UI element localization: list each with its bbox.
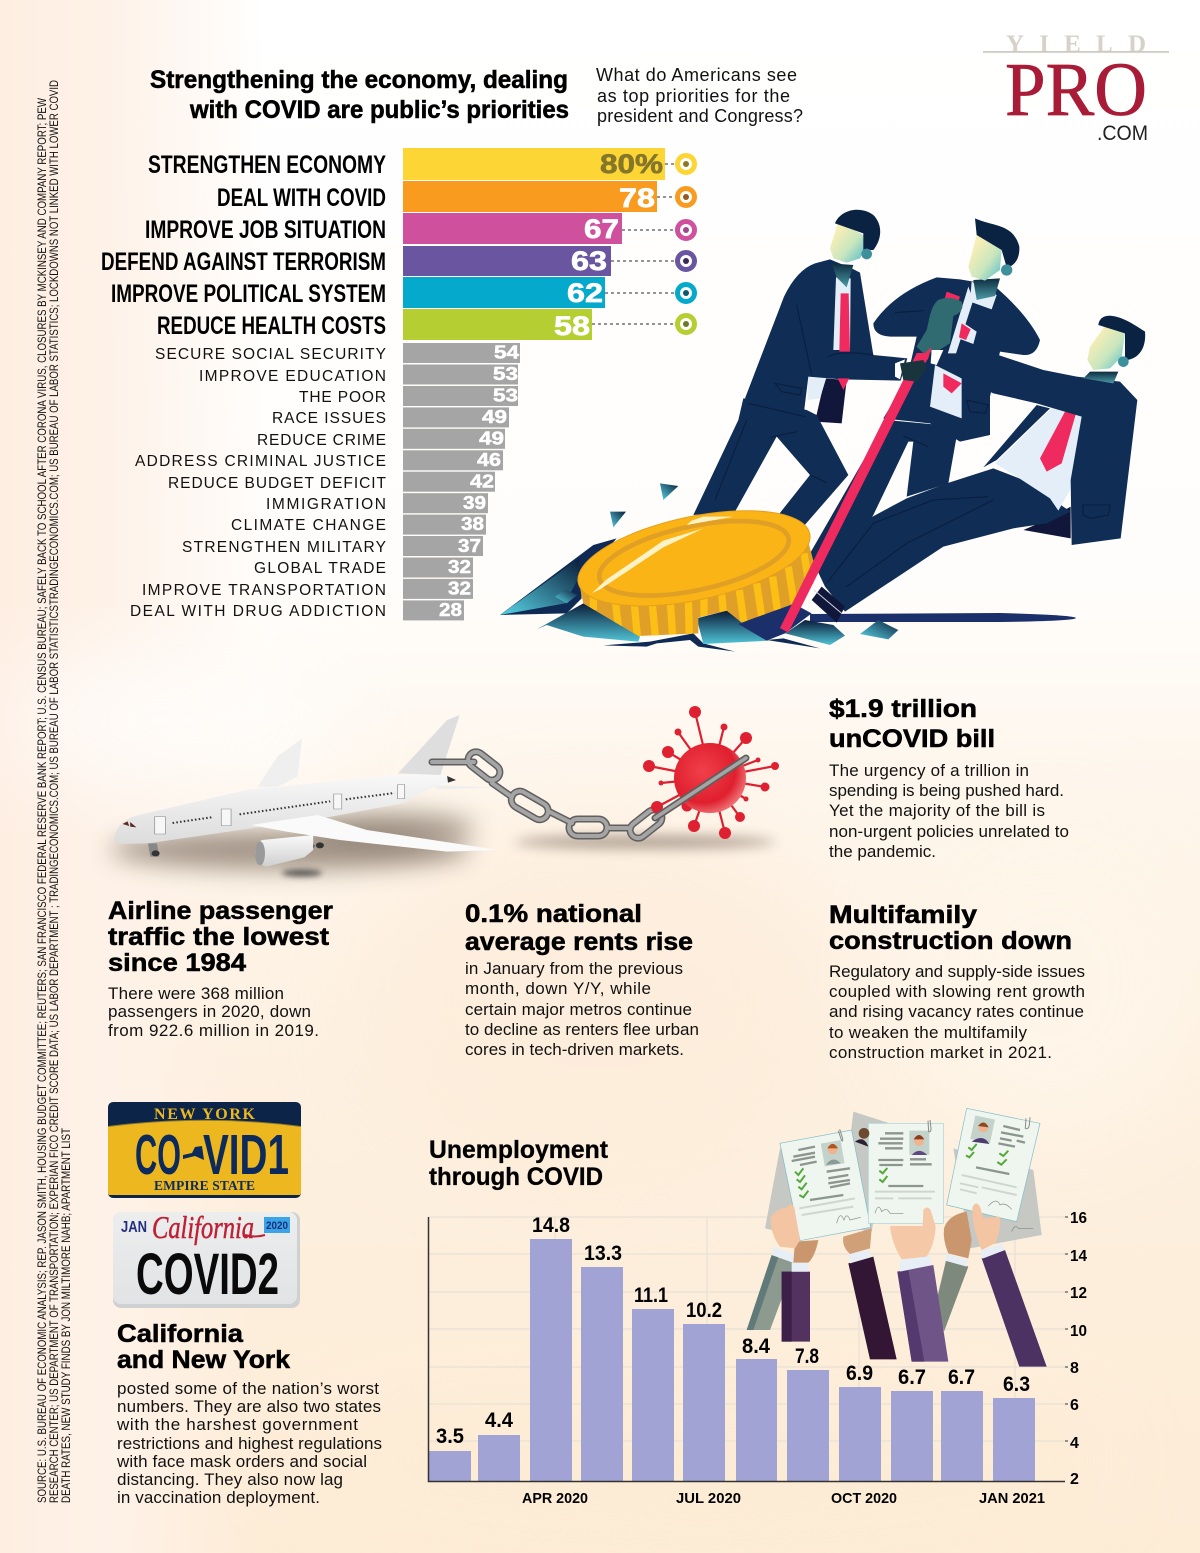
x axis labels: OCT 2020 — [831, 1490, 897, 1507]
text block: national average rents: 0.1% national — [465, 900, 642, 928]
lower priority labels: THE POOR — [299, 389, 386, 406]
lower priority values: 42 — [470, 472, 494, 492]
lower priority labels: CLIMATE CHANGE — [231, 517, 386, 534]
lower priority labels: REDUCE CRIME — [257, 432, 386, 449]
unemployment bars — [429, 1239, 1035, 1481]
logo: Yield Pro: .COM — [1097, 122, 1148, 145]
y axis labels: 4 — [1070, 1435, 1079, 1452]
license plate: New York — [108, 1102, 301, 1198]
top six values: 78 — [619, 183, 655, 213]
lower priority labels — [130, 346, 387, 620]
y axis labels: 10 — [1070, 1323, 1087, 1340]
text block: $1.9 trillion: non-urgent policies unrelated to — [829, 822, 1069, 841]
subtitle question: What do Americans see — [596, 65, 797, 85]
lower priority labels: IMMIGRATION — [266, 496, 386, 513]
top six priority labels: IMPROVE JOB SITUATION — [145, 216, 386, 244]
top six values: 62 — [567, 278, 603, 308]
bar value labels: 10.2 — [686, 1299, 722, 1322]
text block: California and New York: posted some of the nation’s worst — [117, 1379, 379, 1398]
y axis labels: 8 — [1070, 1360, 1079, 1377]
x axis labels: APR 2020 — [522, 1490, 588, 1507]
license plate: California: COVID2 — [136, 1242, 279, 1307]
subtitle question: as top priorities for the — [597, 86, 790, 106]
text block: $1.9 trillion: the pandemic. — [829, 842, 936, 861]
lower priority grey bars — [403, 343, 520, 620]
lower priority labels: IMPROVE EDUCATION — [199, 368, 386, 385]
lower priority labels: STRENGTHEN MILITARY — [182, 539, 386, 556]
three businessmen — [693, 210, 1145, 623]
lower priority values: 32 — [448, 557, 471, 577]
license plate: New York: EMPIRE STATE — [154, 1178, 255, 1193]
back grey resumes — [765, 1112, 1042, 1248]
text block: airline passenger traffic: There were 368 million — [108, 984, 284, 1003]
source credits (rotated): DEATH RATES, NEW STUDY FINDS BY JON MILTIMORE NAHB; APARTMENT LIST — [59, 1128, 73, 1503]
arms — [747, 1250, 1047, 1367]
cuffs — [772, 1244, 1005, 1272]
text block: multifamily construction: and rising vacancy rates continue — [829, 1002, 1084, 1021]
top six priority labels: DEAL WITH COVID — [217, 184, 386, 212]
bar value labels: 6.9 — [846, 1362, 873, 1385]
logo: Yield Pro: YIELD — [1006, 31, 1146, 58]
lower priority values: 39 — [463, 493, 486, 513]
lower priority labels: SECURE SOCIAL SECURITY — [155, 346, 386, 363]
seated man — [810, 316, 1145, 623]
top six coloured bars — [403, 148, 665, 340]
text block: $1.9 trillion: $1.9 trillion — [829, 695, 977, 723]
license plate: New York: NEW YORK — [154, 1106, 256, 1123]
lower priority labels: IMPROVE TRANSPORTATION — [142, 582, 386, 599]
top six priority labels: STRENGTHEN ECONOMY — [148, 151, 386, 179]
text block: national average rents: in January from the previous — [465, 959, 683, 978]
text block: multifamily construction: Regulatory and supply-side issues — [829, 962, 1085, 981]
bar value labels: 6.3 — [1003, 1373, 1030, 1396]
text block: multifamily construction: construction down — [829, 927, 1072, 955]
bar chart: unemployment — [428, 1210, 1087, 1507]
text block: multifamily construction — [829, 901, 1085, 1062]
bar value labels: 14.8 — [532, 1214, 570, 1237]
logo: Yield Pro — [983, 31, 1169, 145]
red crowbar — [780, 353, 928, 633]
text block: California and New York: with face mask orders and social — [116, 1452, 367, 1471]
x axis labels: JUL 2020 — [676, 1490, 741, 1507]
license plate: California — [113, 1209, 300, 1308]
y axis labels: 2 — [1070, 1471, 1079, 1488]
lower priority values: 53 — [493, 364, 518, 384]
text block: $1.9 trillion: spending is being pushed hard. — [829, 781, 1064, 800]
bar value labels: 6.7 — [948, 1366, 975, 1389]
virus — [643, 706, 779, 839]
plane shadows — [110, 812, 475, 876]
text block: $1.9 trillion — [829, 695, 1069, 861]
lower priority values: 46 — [477, 450, 501, 470]
text block: California and New York: restrictions and highest regulations — [117, 1434, 382, 1453]
bar value labels: 7.8 — [795, 1345, 819, 1368]
text block: national average rents: certain major metros continue — [465, 1000, 692, 1019]
top six values: 67 — [584, 214, 619, 244]
lower priority values: 37 — [458, 536, 481, 556]
front resumes — [780, 1108, 1040, 1241]
text block: national average rents: to decline as renters flee urban — [465, 1020, 699, 1039]
license plate: California: 2020 — [266, 1220, 288, 1232]
lower priority values: 28 — [439, 600, 462, 620]
license plate: California: California — [152, 1209, 254, 1245]
subtitle question: president and Congress? — [597, 106, 803, 126]
title: Strengthening the economy, dealing — [150, 66, 568, 94]
top six priority labels: REDUCE HEALTH COSTS — [157, 312, 386, 340]
text block: $1.9 trillion: The urgency of a trillion in — [829, 761, 1029, 780]
text block: $1.9 trillion: Yet the majority of the bill is — [829, 801, 1045, 820]
top six values: 58 — [554, 311, 590, 341]
bar value labels: 6.7 — [898, 1366, 926, 1389]
source credits (rotated) — [35, 80, 73, 1503]
text block: California and New York: with the harshest government — [116, 1415, 358, 1434]
left man — [693, 210, 907, 527]
top six priority labels: DEFEND AGAINST TERRORISM — [101, 248, 386, 276]
illustration: airplane chained to virus — [110, 706, 779, 876]
bar value labels: 4.4 — [485, 1409, 513, 1432]
text block: multifamily construction: Multifamily — [829, 901, 977, 929]
title — [150, 66, 569, 124]
lower priority labels: GLOBAL TRADE — [254, 560, 386, 577]
lower priority values: 38 — [461, 514, 484, 534]
text block: multifamily construction: coupled with slowing rent growth — [829, 982, 1085, 1001]
text block: California and New York: in vaccination deployment. — [117, 1488, 320, 1507]
lower priority labels: ADDRESS CRIMINAL JUSTICE — [135, 453, 386, 470]
middle man — [810, 218, 1040, 583]
y axis labels: 16 — [1070, 1210, 1087, 1227]
text block: airline passenger traffic: Airline passenger — [108, 897, 333, 925]
illustration: hands holding resumes — [747, 1108, 1047, 1367]
license plate: California: JAN — [121, 1219, 147, 1236]
text block: national average rents: average rents rise — [465, 928, 693, 956]
text block: California and New York: distancing. They also now lag — [117, 1470, 343, 1489]
logo: Yield Pro: PRO — [1005, 48, 1147, 132]
license plate: New York: VID1 — [203, 1123, 289, 1187]
text block: airline passenger traffic: passengers in 2020, down — [108, 1002, 311, 1021]
axes — [428, 1217, 1065, 1482]
text block: airline passenger traffic: traffic the lowest — [108, 923, 330, 951]
text block: California and New York: numbers. They are also two states — [117, 1397, 381, 1416]
hands on crowbar — [900, 292, 962, 382]
top six priority labels — [101, 151, 386, 340]
chart heading: Unemployment — [429, 1136, 609, 1164]
cracked ground shards — [500, 483, 898, 652]
top six priority labels: IMPROVE POLITICAL SYSTEM — [111, 280, 386, 308]
top six values — [554, 149, 663, 341]
hands — [793, 1212, 972, 1263]
lower priority labels: RACE ISSUES — [272, 410, 386, 427]
chain — [432, 749, 665, 841]
lower priority values: 49 — [479, 428, 504, 448]
text block: multifamily construction: construction market in 2021. — [829, 1043, 1052, 1062]
text block: $1.9 trillion: unCOVID bill — [829, 725, 995, 753]
airplane — [115, 715, 498, 867]
top six values: 80% — [600, 149, 663, 179]
bar value labels: 3.5 — [436, 1425, 464, 1448]
x axis labels — [522, 1490, 1045, 1507]
illustration: businessmen pulling a coin — [500, 210, 1145, 652]
text block: national average rents: month, down Y/Y, while — [465, 979, 651, 998]
text block: national average rents — [465, 900, 699, 1059]
text block: airline passenger traffic: since 1984 — [108, 949, 246, 977]
subtitle question — [596, 65, 803, 126]
bar chart: priorities — [101, 148, 694, 620]
lower priority labels: REDUCE BUDGET DEFICIT — [168, 475, 387, 492]
lower priority labels: DEAL WITH DRUG ADDICTION — [130, 603, 386, 620]
gold coin — [577, 510, 814, 636]
title: with COVID are public’s priorities — [189, 96, 569, 124]
bar value labels — [436, 1214, 1030, 1448]
chart heading — [429, 1136, 609, 1191]
y axis labels: 14 — [1070, 1248, 1087, 1265]
text block: California and New York: and New York — [117, 1346, 290, 1374]
text block: national average rents: cores in tech-driven markets. — [465, 1040, 684, 1059]
x axis labels: JAN 2021 — [979, 1490, 1045, 1507]
top six values: 63 — [571, 246, 607, 276]
lower priority values: 49 — [482, 407, 507, 427]
chart heading: through COVID — [429, 1163, 603, 1191]
front hands and thumbs — [771, 1203, 1000, 1259]
y axis labels: 12 — [1070, 1285, 1087, 1302]
text block: California and New York: California — [117, 1320, 244, 1348]
chain shadow — [515, 835, 775, 849]
text block: airline passenger traffic — [108, 897, 333, 1040]
y axis labels — [1070, 1210, 1087, 1488]
y axis labels: 6 — [1070, 1397, 1079, 1414]
lower priority values: 53 — [493, 386, 518, 406]
lower priority values: 54 — [494, 342, 519, 362]
text block: airline passenger traffic: from 922.6 million in 2019. — [108, 1021, 319, 1040]
lower priority values — [439, 342, 519, 620]
bar value labels: 11.1 — [634, 1284, 668, 1307]
license plate: New York: CO — [135, 1123, 181, 1187]
text block: California and New York — [116, 1320, 382, 1507]
bar value labels: 8.4 — [742, 1335, 770, 1358]
ground shadow — [810, 613, 1076, 622]
text block: multifamily construction: to weaken the multifamily — [829, 1023, 1028, 1042]
bar value labels: 13.3 — [584, 1242, 622, 1265]
dashed leaders and target markers — [592, 156, 694, 332]
lower priority values: 32 — [448, 578, 471, 598]
